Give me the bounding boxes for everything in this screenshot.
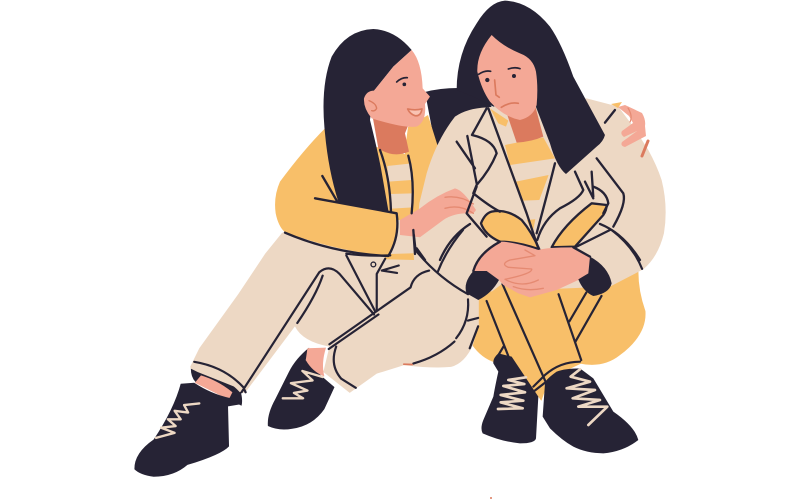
right woman's face [477, 35, 537, 120]
right woman's shoes [481, 353, 638, 453]
left woman's striped shirt [375, 147, 414, 260]
second left shoe [268, 348, 334, 429]
lower-body outlines [194, 230, 642, 392]
right woman's striped shirt [490, 108, 555, 233]
legs and shoes [134, 230, 642, 477]
tiny speck at the bottom [490, 497, 492, 499]
left woman's beige trousers [190, 230, 479, 393]
front shoe [543, 368, 638, 453]
ankle line [533, 362, 580, 387]
left woman's yellow jacket sleeve [275, 128, 398, 257]
right woman's hair [457, 1, 605, 174]
clasped hands [466, 242, 612, 300]
right woman's shins [482, 284, 581, 401]
right woman's yellow knees [481, 203, 607, 249]
second left shoe laces [283, 371, 323, 398]
hand outlines [473, 242, 590, 271]
trouser cuff [191, 362, 245, 392]
back shoe [481, 353, 538, 443]
right woman's beige jacket [418, 98, 666, 293]
left shoe laces [156, 403, 199, 438]
sad eyes and brows [479, 68, 520, 82]
left woman's hair [323, 29, 412, 212]
smiling eye and brow [397, 78, 407, 86]
left woman's face [364, 50, 430, 127]
left shoe [134, 383, 242, 477]
front shoe laces [567, 369, 607, 425]
left woman's hand on right woman's shoulder [611, 102, 648, 156]
left sleeve cuff [466, 271, 499, 300]
frown [501, 103, 518, 107]
ankle of second shoe [306, 348, 326, 376]
left woman's hand on friend's arm [400, 188, 476, 237]
right woman's neck [507, 105, 543, 143]
back hair between the two women [425, 88, 494, 150]
ear detail [369, 101, 377, 111]
right woman's yellow trousers behind legs [472, 264, 646, 401]
small knee accent [404, 362, 412, 367]
right sleeve cuff [578, 257, 612, 296]
jacket outlines, upper body [285, 108, 640, 260]
far left sock and cuff [191, 369, 242, 406]
left woman's yellow jacket collar [405, 115, 438, 262]
left woman's neck [373, 117, 409, 154]
far left sock [195, 375, 232, 400]
back shoe laces [498, 377, 526, 409]
nose [495, 80, 499, 97]
finger lines [505, 250, 543, 290]
smile [408, 109, 422, 116]
